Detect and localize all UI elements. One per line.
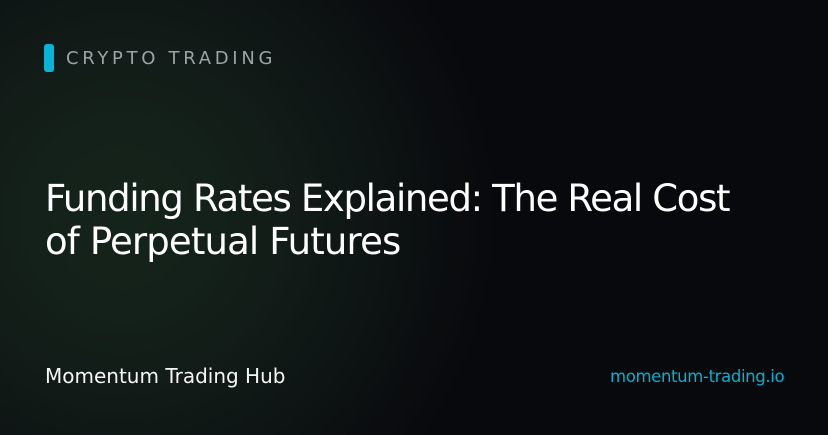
title: Funding Rates Explained: The Real Cost — [45, 177, 729, 220]
title: of Perpetual Futures — [45, 220, 400, 263]
brand name: Momentum Trading Hub — [45, 364, 285, 388]
website url: momentum-trading.io — [610, 367, 784, 386]
icon: cyan accent bar — [44, 44, 54, 72]
title — [45, 177, 730, 263]
category label: CRYPTO TRADING — [66, 48, 276, 69]
